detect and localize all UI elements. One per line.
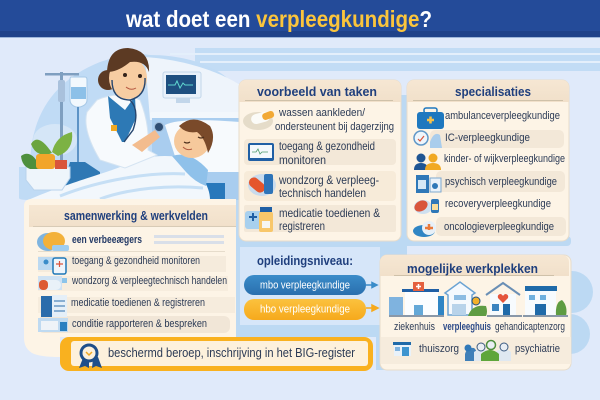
icon: people xyxy=(414,154,441,170)
arrow: mbo xyxy=(366,282,377,288)
panel: voorbeeld van taken: technisch handelen xyxy=(279,186,366,200)
text: ambulanceverpleegkundige: ambulanceverpleegkundige xyxy=(445,110,560,122)
arrow: hbo xyxy=(366,305,378,311)
text: oncologie: oncologieverpleegkundige xyxy=(444,221,554,233)
panel: voorbeeld van taken: ondersteunent bij dagerzijng xyxy=(275,121,394,133)
icon: capsule xyxy=(38,276,67,290)
heading: specialisaties: specialisaties xyxy=(455,84,531,99)
icon: medical bag xyxy=(417,108,444,129)
title banner xyxy=(0,0,600,38)
text: verpleeghuis: verpleeghuis xyxy=(443,321,491,333)
text: conditie: conditie rapporteren & bespreken xyxy=(72,318,207,330)
panel: specialisaties xyxy=(407,80,569,241)
pill: mbo verpleegkundige: mbo verpleegkundige xyxy=(260,280,350,292)
text: medicatie: medicatie toedienen & registreren xyxy=(71,297,205,309)
icon: tablet xyxy=(416,175,441,193)
icon: medication bottle xyxy=(245,207,273,232)
text: psychisch: psychisch verpleegkundige xyxy=(445,176,557,188)
text: gehandicaptenzorg: gehandicaptenzorg xyxy=(495,321,565,333)
icon: house with heart xyxy=(486,283,522,317)
icon: award rosette xyxy=(79,344,102,368)
icon: soap and sponge xyxy=(243,110,275,130)
icon: monitor xyxy=(163,72,201,103)
icon: pills and bottle xyxy=(247,174,276,196)
text: beschermd beroep: beschermd beroep, inschrijving in het BIG-register xyxy=(108,346,355,360)
icon: sponge xyxy=(37,232,69,251)
icon: clock and sling xyxy=(414,131,442,148)
icon: nursing home xyxy=(445,282,487,316)
heading: samenwerking: samenwerking & werkvelden xyxy=(64,208,208,223)
bed xyxy=(28,112,240,200)
pill: hbo verpleegkundige: hbo verpleegkundige xyxy=(260,304,350,316)
nurse xyxy=(86,48,164,168)
icon: plant tray xyxy=(21,132,72,190)
text: ziekenhuis: ziekenhuis xyxy=(394,321,435,333)
text: IC-verpleegkundige: IC-verpleegkundige xyxy=(445,132,530,144)
heading: voorbeeld van taken: voorbeeld van taken xyxy=(257,84,377,99)
text: medicatie: medicatie toedienen & xyxy=(279,206,380,220)
icon: monitor xyxy=(248,143,274,161)
text: psychiatrie: psychiatrie xyxy=(515,343,560,355)
pill: mbo verpleegkundige xyxy=(244,275,366,295)
panel: voorbeeld van taken: registreren xyxy=(279,219,325,233)
patient xyxy=(172,120,213,186)
icon: records binder xyxy=(41,295,67,317)
icon: report xyxy=(38,318,68,332)
panel: samenwerking en werkvelden xyxy=(24,199,236,357)
icon: pill and bottle xyxy=(412,198,439,214)
panel: mogelijke werkplekken xyxy=(380,255,571,370)
heading: mogelijke werkplekken: mogelijke werkplekken xyxy=(407,261,538,276)
icon: care building xyxy=(523,286,568,317)
text: recovery: recoveryverpleegkundige xyxy=(445,198,551,210)
title: wat doet een verpleegkundige? xyxy=(125,6,432,32)
callout: beschermd beroep xyxy=(60,337,373,371)
text: wassen aankleden: wassen aankleden/ xyxy=(278,107,366,119)
text: een verbeeægers: een verbeeægers xyxy=(72,234,142,246)
text: wondzorg: wondzorg & verpleegtechnisch handelen xyxy=(71,275,227,287)
text: thuiszorg: thuiszorg xyxy=(419,343,459,355)
icon: clipboard xyxy=(38,257,66,274)
icon: home care xyxy=(393,342,411,356)
text: wondzorg: wondzorg & verpleeg- xyxy=(278,173,379,187)
heading: opleidingsniveau: opleidingsniveau: xyxy=(257,253,353,268)
icon: oncology ribbon xyxy=(413,221,436,237)
pill: hbo verpleegkundige xyxy=(244,299,366,320)
background stripes and blue backdrop xyxy=(170,48,600,370)
text: toegang: toegang & gezondheid monitoren xyxy=(72,255,200,267)
panel: voorbeeld van taken xyxy=(239,80,401,241)
illustration: nurse and patient xyxy=(19,48,240,200)
panel: voorbeeld van taken: monitoren xyxy=(279,153,326,167)
icon: IV stand xyxy=(45,72,100,190)
icon: hospital xyxy=(389,282,444,317)
text: toegang monitoren: toegang & gezondheid xyxy=(279,139,375,153)
icon: psychiatry group xyxy=(464,340,511,361)
text: kinder- of wijkverpleegkundige: kinder- of wijkverpleegkundige xyxy=(444,153,565,165)
